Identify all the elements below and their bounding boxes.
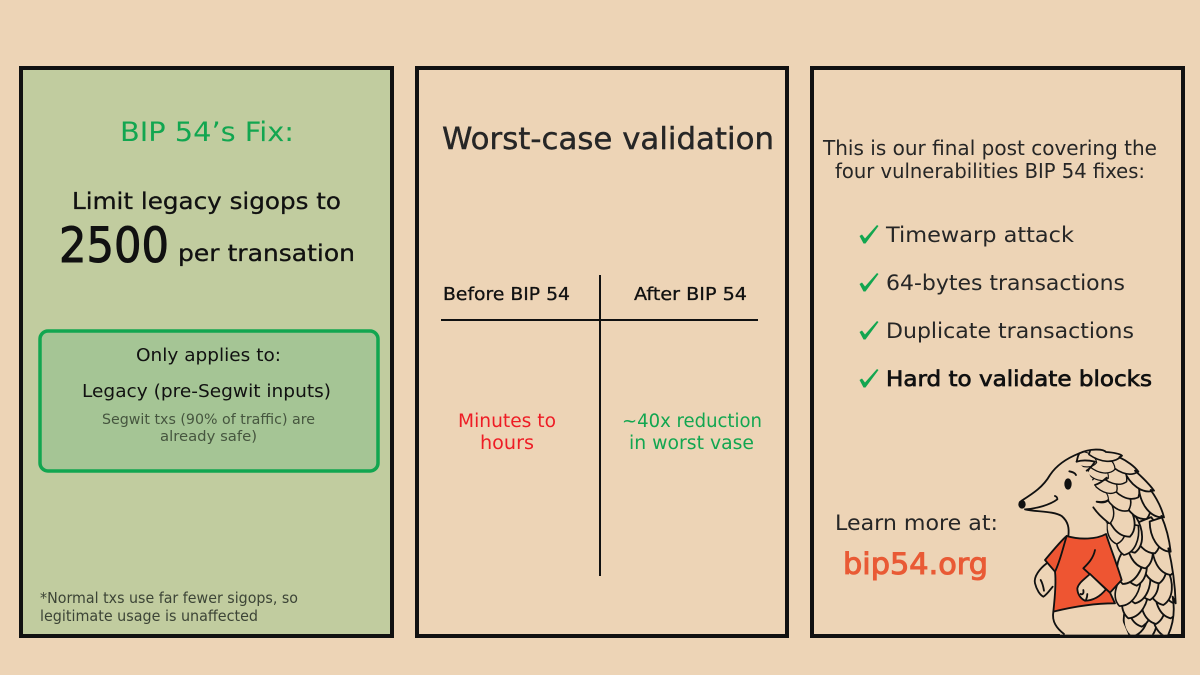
hand claws [1081,590,1087,600]
checklist [860,223,1152,392]
head scale edges [1077,460,1108,523]
panel border [812,68,1183,636]
value: before: hours [480,433,534,454]
jaw and neck [1025,509,1069,536]
callout: only applies to: Legacy (pre-Segwit inputs) [82,381,331,402]
left arm [1035,563,1053,597]
mouth [1026,496,1057,509]
column header: before: Before BIP 54 [443,284,570,305]
heading: BIP 54's Fix: BIP 54’s Fix: [120,117,294,148]
intro text: four vulnerabilities BIP 54 fixes: [835,159,1145,183]
item: hard to validate blocks: Hard to validate blocks [886,367,1152,392]
table lines [441,275,758,576]
link: bip54.org: bip54.org [843,547,988,581]
limit statement [59,189,355,274]
head outline [1022,453,1079,501]
callout: only applies to [40,331,378,471]
column header: after: After BIP 54 [634,284,747,305]
body bottom [1053,612,1064,634]
footnote [40,589,298,625]
limit statement: 2500 [59,218,169,274]
item: timewarp: Timewarp attack [885,223,1075,248]
value: after: ~40x reduction [622,411,762,432]
value: before [458,411,556,454]
icon: pangolin mascot [1018,448,1177,635]
panel: worst-case validation [417,68,787,636]
item: duplicate transactions: Duplicate transactions [886,319,1134,344]
panel: final post [812,68,1188,642]
learn more label: Learn more at: [835,511,998,536]
item: 64-byte transactions: 64-bytes transactions [886,271,1125,296]
callout: only applies to: Segwit txs (90% of traffic) are [102,412,315,428]
panel background [21,68,392,636]
head and body fill [1022,453,1128,635]
scales [1080,450,1173,635]
hand [1077,574,1106,601]
value: before: Minutes to [458,411,556,432]
panel: BIP 54 fix [21,68,392,636]
brow [1069,471,1076,475]
footnote: legitimate usage is unaffected [40,607,258,625]
back outline [1079,450,1176,635]
limit statement: per transation [178,241,355,267]
eye [1064,478,1072,490]
nose [1018,500,1026,509]
t-shirt [1045,534,1122,612]
footnote: *Normal txs use far fewer sigops, so [40,589,298,607]
intro text [822,136,1157,183]
intro text: This is our final post covering the [822,136,1157,160]
value: after [622,411,762,454]
left arm claw [1041,580,1044,591]
value: after: in worst vase [629,433,754,454]
heading: worst-case validation: Worst-case validation [442,122,774,157]
callout: only applies to: Only applies to: [136,345,281,366]
callout: only applies to: already safe) [160,429,257,445]
limit statement: Limit legacy sigops to [72,189,341,215]
t-shirt folds [1055,536,1110,593]
panel border [417,68,787,636]
